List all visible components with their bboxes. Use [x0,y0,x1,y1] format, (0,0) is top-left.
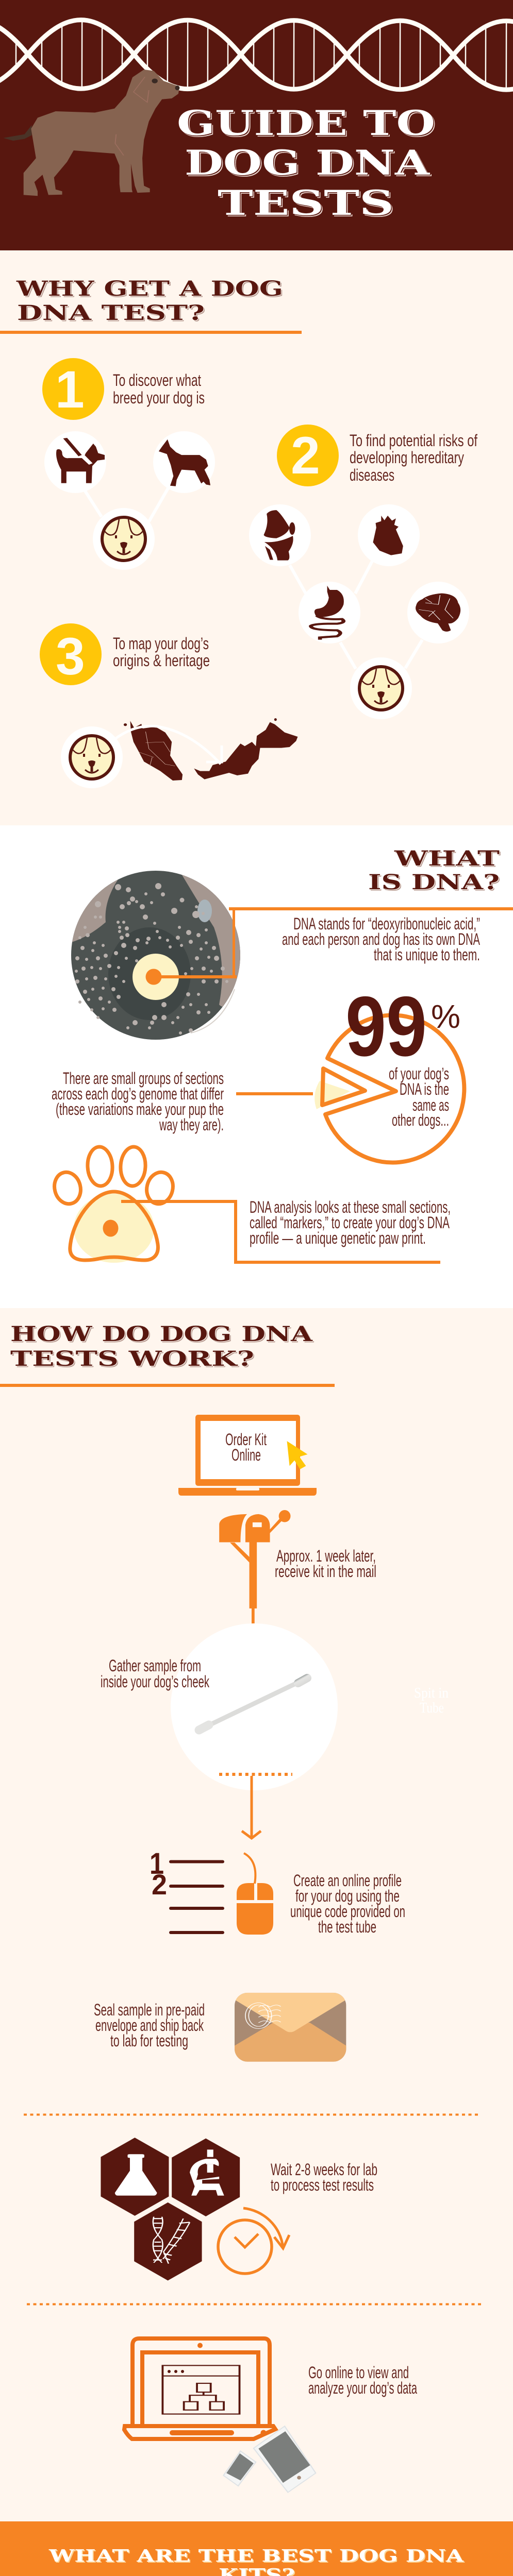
variation text: (these variations make your pup the [56,1100,224,1118]
panel: how do dog DNA tests work [0,1308,513,2521]
reason 3: number badge: 3 [56,627,85,686]
step: order kit laptop: Online [231,1446,261,1464]
icons: lab hexagons [101,2138,240,2281]
icon: clock with arrow [218,2208,289,2274]
seal sample text: envelope and ship back [95,2016,204,2035]
step: numbered list icon: 2 [152,1868,167,1901]
heading: what is DNA: IS DNA? [368,870,500,894]
heading: how tests work: HOW DO DOG DNA [10,1322,313,1346]
seal sample text: Seal sample in pre-paid [94,2001,205,2019]
step: numbered list icon [150,1847,224,1934]
pie chart: 99 percent [315,1015,464,1162]
panel: what is DNA [52,850,513,1264]
heading: what is DNA: WHAT [394,846,500,871]
step: cheek swab circle [171,1623,338,1790]
connector lines to disease icons [290,561,422,669]
icons: phones [223,2426,316,2493]
hidden white note: spit in tube [414,1685,449,1716]
big number 99 percent: % [431,998,460,1035]
reason 1 text: To discover what [113,371,201,389]
swab text: inside your dog’s cheek [101,1672,210,1691]
reason 1 text [113,371,205,407]
reason 2 text: developing hereditary [350,448,464,467]
panel: header [0,0,513,250]
pie text: DNA is the [400,1080,449,1098]
title: GUIDE TO [177,103,435,143]
icon: dog face (origins) [61,726,123,788]
map of Malaysia [124,718,297,781]
heading: why get a dog DNA test: WHY GET A DOG [16,277,283,301]
arrow down [242,1776,261,1838]
profile text: Create an online profile [293,1871,402,1890]
icon: stomach and intestines [299,582,360,643]
reason 3 text [113,634,210,670]
title: DOG DNA [185,143,430,183]
mailbox text [275,1547,376,1581]
variation text: There are small groups of sections [63,1069,224,1088]
panel: best dog DNA kits banner [0,2521,513,2576]
hidden white note: spit in tube: Spit in [414,1685,449,1701]
wait text: Wait 2-8 weeks for lab [271,2160,377,2179]
heading: what is DNA [368,846,500,894]
petri dish photo [70,866,247,1040]
heading: why get a dog DNA test: DNA TEST? [17,301,205,325]
callout line: paw [121,1201,440,1262]
icon: dog on leash [44,431,106,493]
profile text [290,1871,405,1936]
pie text: other dogs... [392,1111,449,1129]
swab text [101,1656,210,1691]
divider [24,2113,479,2115]
seal sample text [94,2001,205,2050]
illustration: brown dog [3,70,179,196]
mailbox text: receive kit in the mail [275,1562,376,1581]
reason 1 text: breed your dog is [113,388,205,407]
banner heading [48,2546,464,2576]
heading: how tests work [10,1322,313,1371]
pie text: of your dog’s [389,1064,449,1083]
heading underline [0,331,302,334]
profile text: for your dog using the [295,1887,400,1905]
title [177,103,435,223]
icon: standing dog silhouette [153,431,215,493]
marker text [250,1198,451,1247]
icon: brain [407,582,469,643]
icon: dog face (health) [350,657,412,719]
DNA helix [0,20,513,90]
wait text: to process test results [271,2176,374,2194]
pie text: same as [412,1096,449,1114]
icon: paw print [51,1146,176,1263]
heading: why get a dog DNA test [16,277,283,325]
reason 3: number badge [40,623,102,686]
callout marker on dish [133,907,513,1000]
banner heading: WHAT ARE THE BEST DOG DNA [48,2546,464,2566]
marker text: profile — a unique genetic paw print. [250,1229,426,1247]
wait text [271,2160,377,2194]
reason 3 text: origins & heritage [113,651,210,670]
heading underline [0,1384,335,1387]
connector: text to pie slice [236,1092,313,1095]
swab text: Gather sample from [109,1656,201,1675]
arrow: dog to map [114,726,222,764]
step: order kit laptop [178,1415,317,1496]
divider [27,2303,483,2305]
view results text: analyze your dog’s data [308,2379,417,2397]
reason 2 text [350,431,477,484]
reason 1: number badge [42,358,104,420]
icon: computer mouse [237,1853,273,1935]
icon: envelope [235,1993,346,2062]
dotted cut line [219,1773,292,1776]
title: TESTS [218,183,394,223]
variation text: way they are). [159,1115,224,1134]
mailbox text: Approx. 1 week later, [276,1547,376,1565]
view results text: Go online to view and [308,2363,409,2382]
step: order kit laptop: Order Kit [225,1430,267,1449]
icon: heart organ [358,504,420,566]
pie text [389,1064,449,1129]
step: mailbox [219,1510,291,1682]
reason 1: number badge: 1 [55,360,85,419]
DNA definition text [282,914,480,964]
connector lines to breed icons [85,487,169,521]
variation text [52,1069,224,1134]
profile text: unique code provided on [290,1902,405,1921]
reason 3 text: To map your dog’s [113,634,209,653]
variation text: across each dog’s genome that differ [52,1084,224,1103]
seal sample text: to lab for testing [110,2031,188,2050]
profile text: the test tube [318,1918,376,1936]
heading: how tests work: TESTS WORK? [10,1347,254,1371]
view results text [308,2363,417,2397]
hidden white note: spit in tube: Tube [420,1700,444,1716]
reason 2 text: diseases [350,466,394,484]
icon: laptop with data chart [124,2338,275,2439]
icon: dog face (breed) [93,508,155,570]
reason 2: number badge: 2 [291,426,320,485]
step: numbered list icon: 1 [150,1847,164,1880]
panel: why get a dog DNA test [0,250,513,825]
big number 99 percent: 99 [345,979,427,1074]
reason 2: number badge [277,425,339,486]
icon: knee joint [249,504,311,566]
